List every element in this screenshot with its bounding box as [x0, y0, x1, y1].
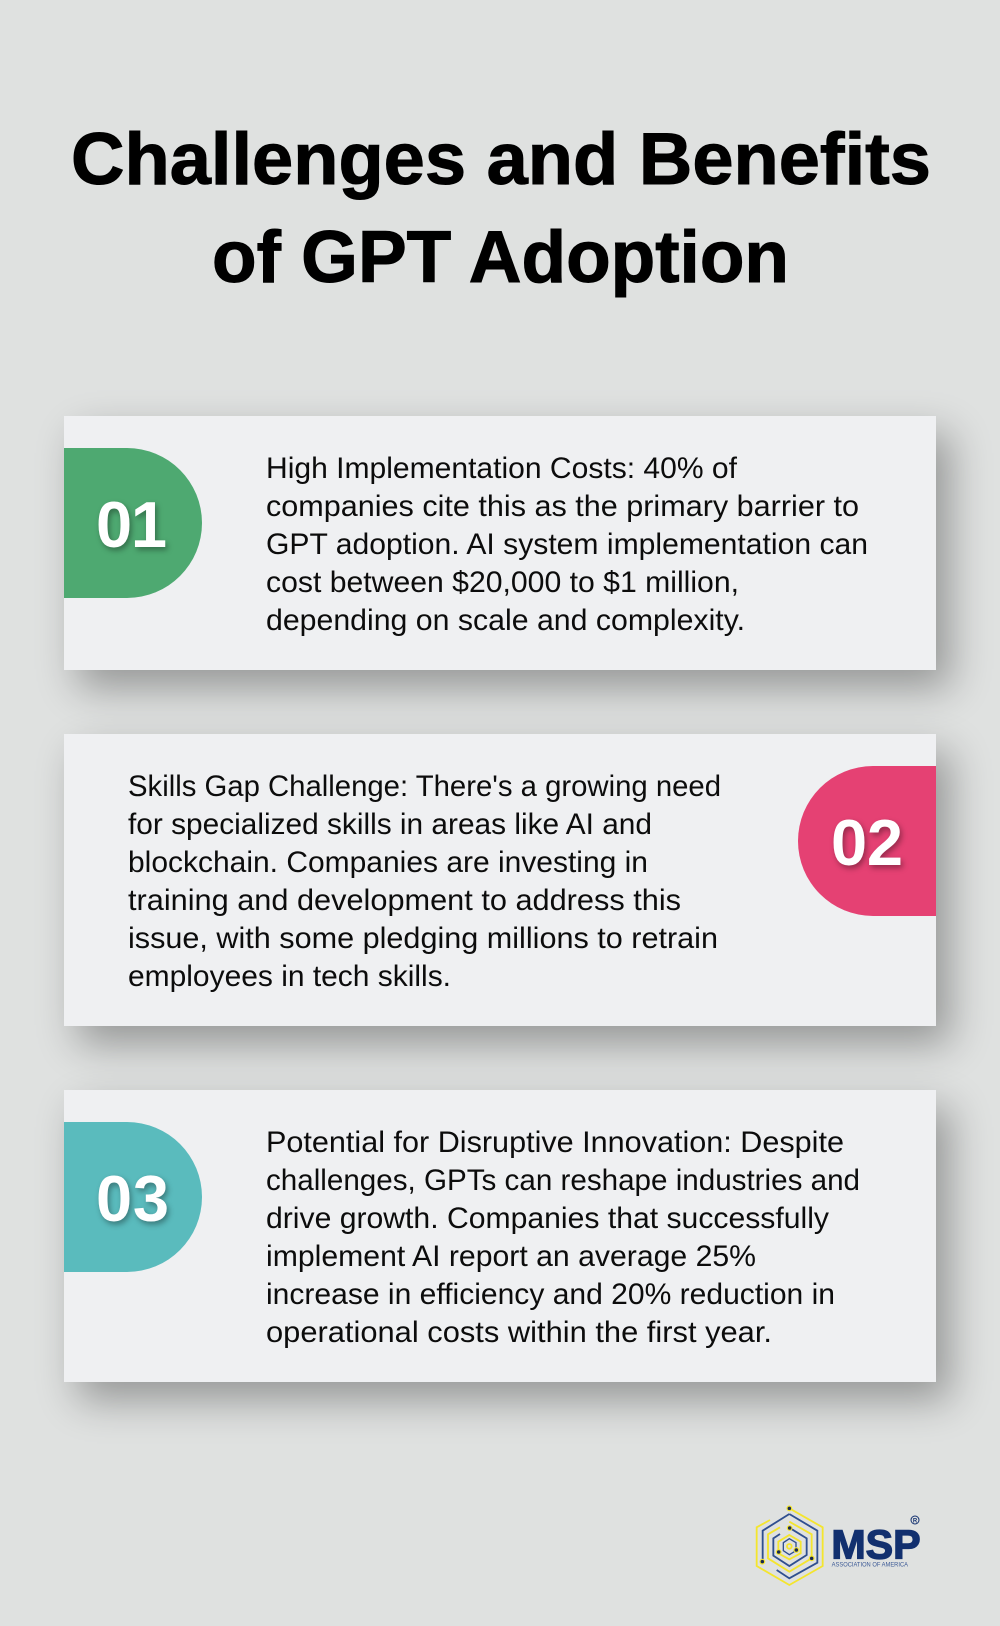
text: potential for disruptive innovation: drive growth. Companies that successfully — [266, 1202, 829, 1235]
text: skills gap challenge: training and development to address this — [128, 884, 681, 917]
badge: 03: 03 — [96, 1162, 169, 1235]
text: skills gap challenge: blockchain. Companies are investing in — [128, 846, 648, 879]
text: skills gap challenge: for specialized skills in areas like AI and — [128, 808, 652, 841]
title: of GPT Adoption — [212, 217, 789, 298]
text: potential for disruptive innovation: increase in efficiency and 20% reduction in — [266, 1278, 835, 1311]
text: high implementation costs: cost between $20,000 to $1 million, — [266, 566, 739, 599]
logo: MSP Association of America: MSP — [831, 1521, 921, 1567]
logo: MSP Association of America — [756, 1505, 921, 1586]
logo: MSP Association of America: ASSOCIATION OF AMERICA — [832, 1563, 908, 1569]
logo: MSP Association of America: R — [913, 1518, 918, 1524]
title: Challenges and Benefits — [71, 119, 931, 200]
text: high implementation costs — [266, 452, 868, 637]
badge: 01 — [64, 448, 202, 598]
text: high implementation costs: High Implementation Costs: 40% of — [266, 452, 738, 485]
text: skills gap challenge: issue, with some pledging millions to retrain — [128, 922, 718, 955]
panel: skills gap challenge — [64, 734, 936, 1026]
badge: 01: 01 — [96, 488, 167, 561]
text: potential for disruptive innovation — [266, 1126, 860, 1349]
text: potential for disruptive innovation: challenges, GPTs can reshape industries and — [266, 1164, 860, 1197]
text: skills gap challenge — [128, 770, 721, 993]
text: potential for disruptive innovation: operational costs within the first year. — [266, 1316, 772, 1349]
text: potential for disruptive innovation: implement AI report an average 25% — [266, 1240, 756, 1273]
badge: 03 — [64, 1122, 202, 1272]
text: skills gap challenge: Skills Gap Challenge: There's a growing need — [128, 770, 721, 803]
title — [71, 119, 931, 298]
panel: high implementation costs — [64, 416, 936, 670]
text: high implementation costs: GPT adoption. AI system implementation can — [266, 528, 868, 561]
text: high implementation costs: companies cite this as the primary barrier to — [266, 490, 859, 523]
badge: 02 — [798, 766, 936, 916]
panel: potential for disruptive innovation — [64, 1090, 936, 1382]
text: high implementation costs: depending on scale and complexity. — [266, 604, 745, 637]
text: potential for disruptive innovation: Potential for Disruptive Innovation: Despite — [266, 1126, 844, 1159]
badge: 02: 02 — [831, 806, 903, 879]
text: skills gap challenge: employees in tech skills. — [128, 960, 451, 993]
